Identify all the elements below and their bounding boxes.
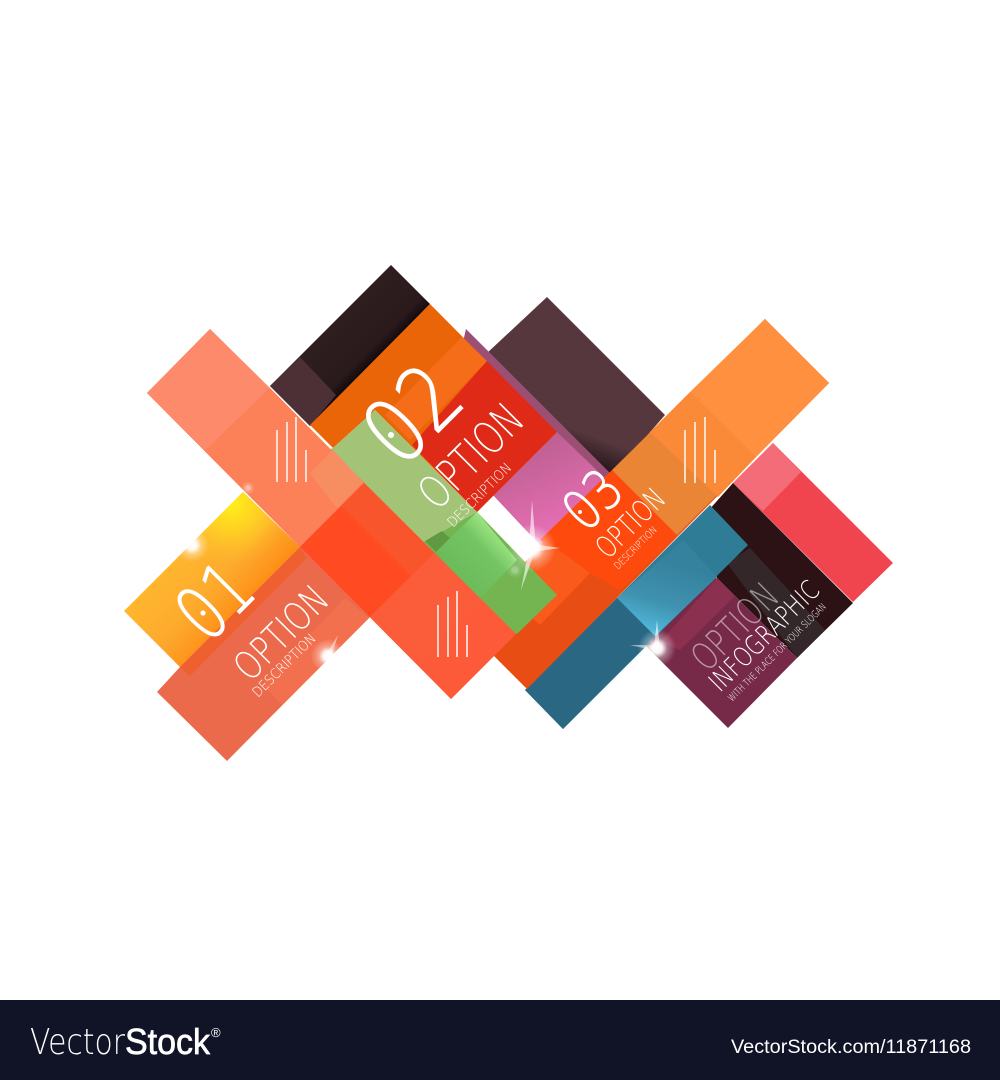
footer image id: VectorStock.com/11871168 (731, 1037, 971, 1058)
panel: green strip (326, 410, 557, 635)
footer logo (30, 1021, 221, 1063)
text block: infographic title (682, 574, 829, 704)
text block: option 03 (550, 457, 673, 572)
icon: bars left (277, 417, 306, 482)
text block: infographic title: WITH THE PLACE FOR YOUR SLOGAN (726, 602, 829, 704)
footer bar (0, 1000, 1000, 1080)
text block: infographic title: INFOGRAPHIC (703, 575, 826, 698)
text block: infographic title: OPTION (682, 574, 788, 679)
text block: option 01: OPTION (225, 577, 338, 690)
icon: bars bottom (438, 591, 467, 657)
panel: dark infographic card (700, 483, 853, 658)
panel: teal band (525, 505, 748, 729)
text block: option 03: 03 (550, 457, 637, 544)
panel: dark brown band (486, 297, 665, 478)
panel: salmon band 01 (157, 547, 370, 761)
footer logo: ® (211, 1025, 221, 1040)
text block: option 03: OPTION (589, 482, 673, 566)
text block: option 03: DESCRIPTION (612, 525, 660, 572)
panel: pink band (440, 329, 625, 545)
footer logo: Stock (125, 1021, 211, 1062)
panel: red band (733, 443, 893, 602)
panel: salmon diagonal band (147, 329, 516, 699)
panel: card 01 (124, 492, 300, 667)
text block: option 01 (158, 544, 338, 701)
text block: option 01: 01 (158, 544, 272, 658)
text block: option 01: DESCRIPTION (250, 631, 320, 701)
panel: dark band behind 02 (270, 265, 430, 426)
text block: option 02 (342, 344, 535, 531)
text block: option 02: 02 (342, 344, 484, 486)
text block: option 02: DESCRIPTION (445, 460, 515, 531)
footer logo: Vector (30, 1022, 125, 1063)
panel: maroon card (640, 578, 797, 728)
lens flares (175, 481, 676, 673)
icon: bars right (685, 417, 715, 483)
panel: card 02 (310, 304, 557, 512)
text block: option 02: OPTION (407, 392, 535, 520)
panel: orange diagonal band (463, 319, 829, 689)
